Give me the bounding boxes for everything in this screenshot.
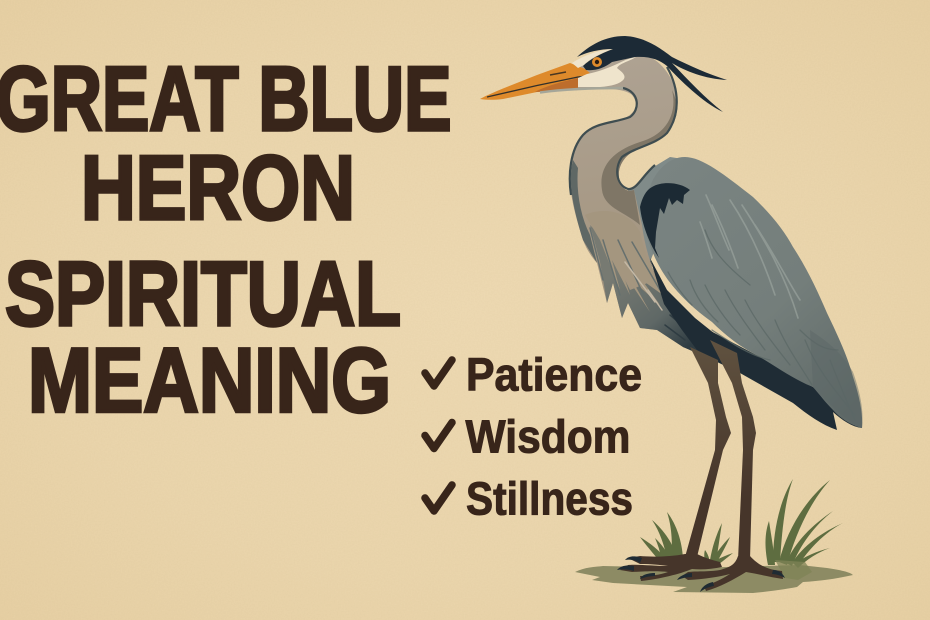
- wing feathers: [668, 195, 855, 420]
- checklist: heron qualities: [425, 348, 642, 524]
- grass: middle tuft: [704, 523, 733, 564]
- title: Great Blue Heron Spiritual Meaning: SPIRITUAL: [5, 244, 401, 345]
- shoulder patch: [640, 183, 690, 258]
- title: Great Blue Heron Spiritual Meaning: HERON: [81, 138, 355, 239]
- title: Great Blue Heron Spiritual Meaning: MEANING: [28, 330, 391, 432]
- cheek: white patch: [578, 57, 636, 87]
- item: Stillness: Stillness: [466, 472, 633, 524]
- neck outline: [570, 88, 637, 195]
- item: Wisdom: Wisdom: [466, 410, 630, 462]
- grass: right tuft: [766, 479, 843, 568]
- neck outer shading: [571, 160, 597, 263]
- crown and head plumes: [577, 36, 727, 112]
- title: Great Blue Heron Spiritual Meaning: GREAT BLUE: [0, 49, 452, 150]
- foot: left: [617, 554, 722, 581]
- title: Great Blue Heron Spiritual Meaning: [0, 49, 452, 432]
- grass: left tuft: [640, 512, 683, 558]
- brow: white stripe: [572, 49, 612, 68]
- chest plume strokes: [590, 228, 690, 340]
- near leg: [710, 340, 756, 560]
- chest plume: tan feathers: [585, 211, 667, 312]
- neck and chest plumes: [570, 54, 690, 347]
- dark under-tail: [642, 223, 862, 430]
- illustration: great blue heron: [480, 36, 863, 593]
- ground patch: [575, 565, 853, 593]
- eye: [592, 57, 602, 67]
- beak: [480, 63, 623, 100]
- item: Patience: Patience: [466, 348, 642, 400]
- breast shadow: [590, 225, 705, 355]
- wing: [640, 157, 862, 428]
- foot: right: [677, 556, 785, 592]
- body behind neck: [628, 157, 690, 262]
- far leg: [685, 347, 731, 557]
- dark band beside wing: [650, 258, 740, 362]
- neck shadow band: [601, 90, 677, 225]
